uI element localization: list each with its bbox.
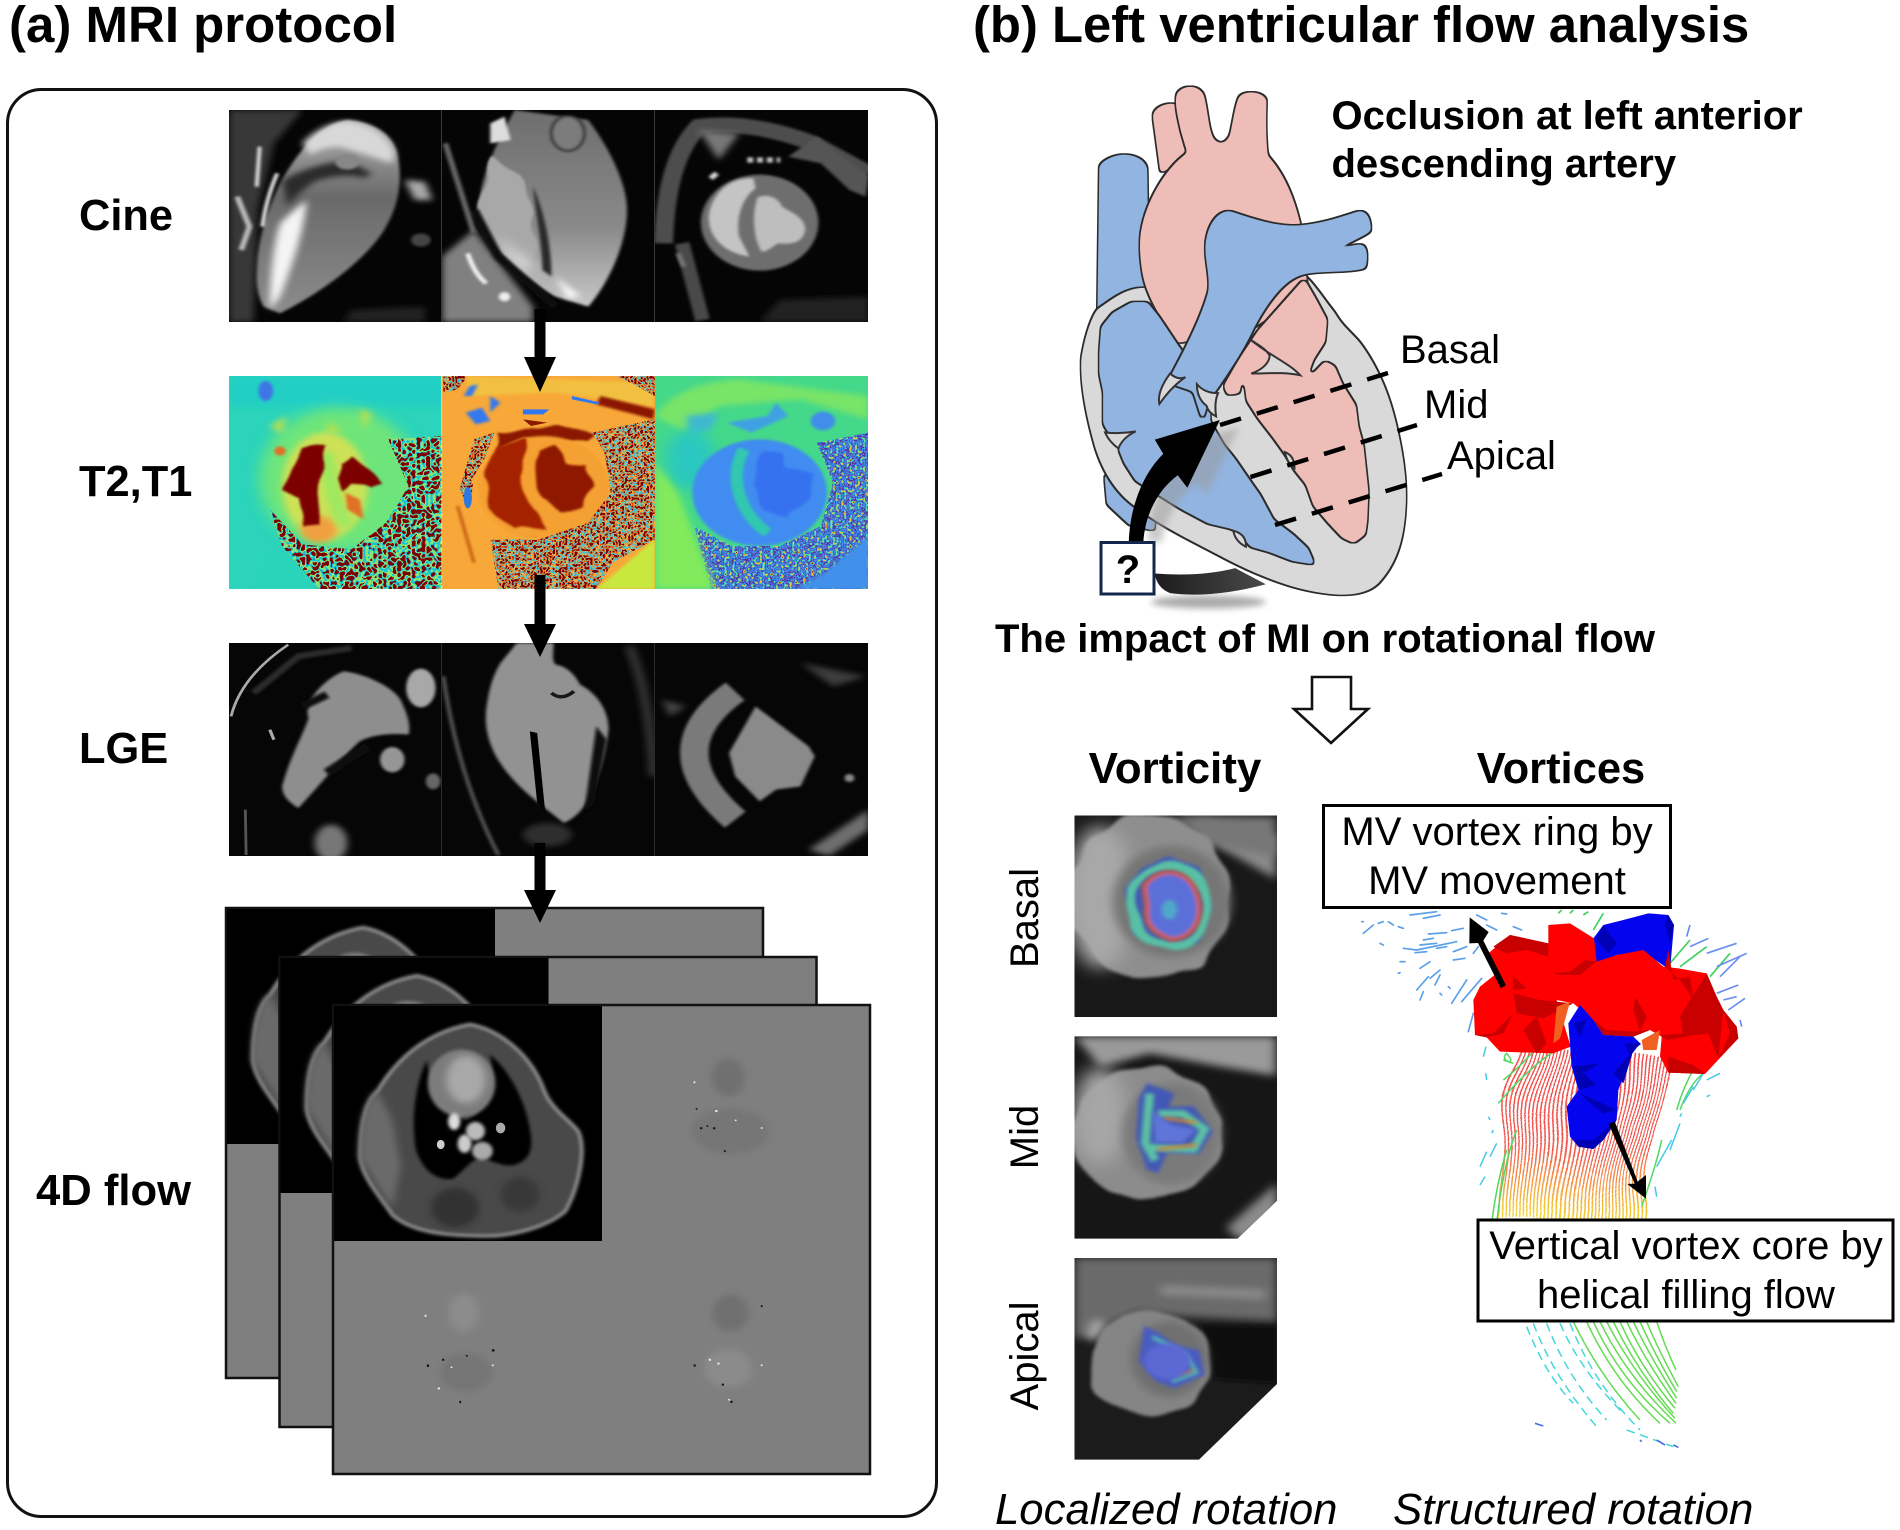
vorticity map: basal xyxy=(1067,815,1278,1018)
label: Basal slice: Basal xyxy=(1003,868,1047,968)
red ring interior streaks xyxy=(1553,1002,1660,1050)
dashed line: apical plane xyxy=(1275,474,1442,525)
question mark box: ? xyxy=(1116,548,1140,592)
hollow down arrow xyxy=(1294,677,1368,743)
blue vortex upper part xyxy=(1593,913,1674,970)
left ventricle xyxy=(1224,279,1368,543)
trabecula detail xyxy=(1105,431,1294,547)
callout: MV vortex ring: MV vortex ring by xyxy=(1341,810,1653,854)
cine image: short axis xyxy=(664,125,869,322)
main flow streamlines xyxy=(1497,1052,1677,1220)
pulmonary artery xyxy=(1170,211,1371,422)
label: Mid: Mid xyxy=(1424,383,1488,427)
cyan side dashes xyxy=(1480,1047,1720,1197)
label: Apical slice: Apical xyxy=(1003,1302,1047,1410)
LGE image: short axis xyxy=(662,663,869,856)
dashed line: mid plane xyxy=(1250,425,1417,477)
image stack: 4D flow back frame xyxy=(226,908,763,1378)
valve leaflets xyxy=(1159,340,1300,416)
label: T2,T1: T2,T1 xyxy=(79,458,192,506)
map: T1 native xyxy=(442,376,656,589)
callout: MV vortex ring: MV movement xyxy=(1368,859,1626,903)
lower cyan dashes xyxy=(1527,1323,1673,1447)
image row: cine MRI xyxy=(229,110,869,322)
label: Basal: Basal xyxy=(1400,328,1500,372)
band shadow xyxy=(1151,596,1266,609)
panel: MRI protocol frame xyxy=(8,90,936,1516)
arrow: to MV vortex ring xyxy=(1469,917,1506,988)
cine image: long axis 1 xyxy=(229,110,432,322)
lower green streamlines xyxy=(1573,1322,1678,1423)
right atrium and ventricle xyxy=(1099,302,1315,565)
map: T1 post contrast xyxy=(655,376,869,589)
vorticity map: apical xyxy=(1074,1258,1278,1461)
arrow: T2,T1 to LGE xyxy=(524,575,556,657)
heading: Vorticity: Vorticity xyxy=(1089,744,1262,793)
text: occlusion: Occlusion at left anterior xyxy=(1332,94,1803,138)
text: occlusion xyxy=(1332,94,1803,186)
label: LGE: LGE xyxy=(79,725,168,773)
question mark box xyxy=(1101,542,1154,594)
text: impact of MI: The impact of MI on rotational flow xyxy=(995,617,1656,661)
image stack: 4D flow middle frame xyxy=(280,957,816,1427)
text: occlusion: descending artery xyxy=(1332,142,1677,186)
LGE image: long axis 1 xyxy=(231,645,440,861)
label: Cine: Cine xyxy=(79,192,173,240)
aorta xyxy=(1140,87,1308,343)
dashed line: basal plane xyxy=(1220,373,1388,425)
blue and cyan flow dashes, upper left xyxy=(1362,912,1522,1032)
heading: Vortices: Vortices xyxy=(1477,745,1645,793)
outer green streamlines xyxy=(1492,1052,1703,1223)
label: 4D flow: 4D flow xyxy=(36,1167,191,1215)
image stack: 4D flow front frame xyxy=(333,1005,870,1474)
LGE image: long axis 2 xyxy=(443,643,654,855)
red vortex ring xyxy=(1473,923,1738,1074)
callout: vertical vortex core: helical filling flow xyxy=(1537,1273,1835,1317)
callout: MV vortex ring xyxy=(1324,806,1670,908)
black band xyxy=(1155,568,1266,595)
vorticity map: mid xyxy=(1071,1036,1278,1239)
image row: LGE xyxy=(229,643,869,861)
green and blue flow streaks, upper right xyxy=(1558,910,1730,977)
aorta branches xyxy=(1153,104,1189,174)
arrow: LGE to 4D flow xyxy=(524,843,556,923)
heart wall xyxy=(1081,275,1406,595)
superior vena cava xyxy=(1097,155,1148,316)
blue vortex core xyxy=(1567,1005,1641,1149)
lower vein xyxy=(1104,474,1155,531)
arrow: cine to T2,T1 xyxy=(524,309,556,392)
map: T2 xyxy=(229,376,443,589)
heart diagram xyxy=(1081,87,1406,609)
arrow: to vortex core xyxy=(1609,1121,1646,1199)
label: Apical: Apical xyxy=(1447,434,1556,478)
3D vortex visualization xyxy=(1362,910,1747,1447)
image row: T2 and T1 maps xyxy=(229,376,869,589)
curved black arrow xyxy=(1129,420,1239,542)
red ring shaded facets xyxy=(1475,935,1738,1074)
callout: vertical vortex core xyxy=(1478,1220,1893,1321)
cine image: long axis 2 xyxy=(442,110,627,322)
callout: vertical vortex core: Vertical vortex core by xyxy=(1489,1224,1883,1268)
label: Mid slice: Mid xyxy=(1003,1105,1047,1169)
